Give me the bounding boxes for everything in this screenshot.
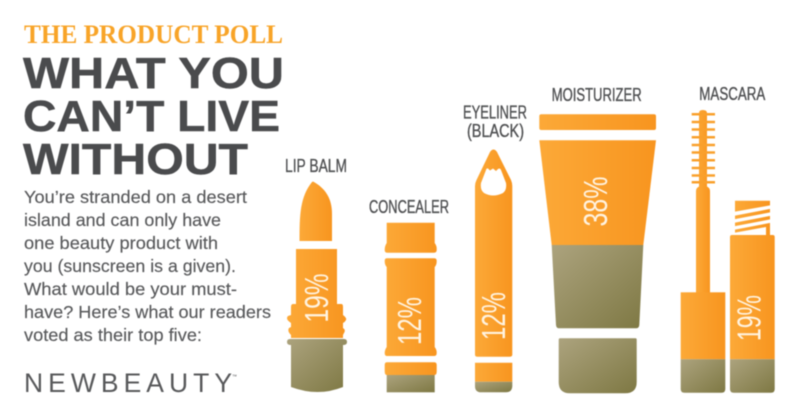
pencil tip base (475, 382, 512, 392)
concealer body (385, 258, 437, 356)
lipstick bullet (300, 182, 332, 241)
mascara tube body (730, 235, 775, 359)
kicker: the product poll: THE PRODUCT POLL (24, 20, 283, 49)
title (23, 49, 284, 184)
product: concealer (369, 197, 449, 392)
intro text block: one beauty product with (24, 233, 218, 253)
logo: NewBeauty: NEWBEAUTY (24, 368, 232, 398)
title: CAN’T LIVE (23, 92, 280, 141)
intro text block: have? Here’s what our readers (24, 302, 271, 322)
mascara tube neck (735, 201, 770, 236)
label: eyeliner (black) (463, 102, 527, 141)
value 12%: 12% (475, 292, 512, 340)
mascara wand (692, 110, 715, 292)
mascara handle (681, 292, 725, 359)
mascara thread stripes (733, 205, 772, 235)
concealer cap (385, 223, 437, 253)
label: moisturizer: MOISTURIZER (552, 85, 642, 105)
label: eyeliner (black): EYELINER (463, 102, 527, 122)
label: lip balm: LIP BALM (285, 156, 347, 176)
concealer base (387, 375, 435, 392)
mascara tube base (730, 359, 775, 393)
intro text block (24, 187, 271, 345)
label: eyeliner (black): (BLACK) (467, 121, 524, 141)
lipstick base (287, 339, 347, 392)
tube upper (539, 140, 656, 245)
tube crimp (539, 114, 656, 130)
title: WITHOUT (23, 135, 248, 184)
lipstick body (287, 249, 346, 338)
pencil body (475, 150, 512, 357)
value 12%: 12% (391, 297, 428, 345)
title: WHAT YOU (23, 49, 284, 98)
intro text block: you (sunscreen is a given). (24, 256, 236, 276)
concealer collar (385, 362, 437, 375)
product: lip balm (285, 156, 347, 392)
intro text block: voted as their top five: (24, 325, 202, 345)
tube cap (559, 338, 637, 393)
pencil end (475, 363, 512, 382)
product: mascara (681, 84, 775, 393)
intro text block: You’re stranded on a desert (24, 187, 247, 207)
value 19%: 19% (298, 274, 335, 322)
logo: NewBeauty: ™ (232, 374, 237, 380)
product: moisturizer (539, 85, 656, 393)
value 19%: 19% (730, 295, 768, 341)
label: mascara: MASCARA (699, 84, 765, 104)
intro text block: island and can only have (24, 210, 221, 230)
intro text block: What would be your must- (24, 279, 237, 299)
mascara handle base (681, 359, 725, 393)
product: eyeliner (463, 102, 527, 392)
value 38%: 38% (577, 176, 614, 226)
label: concealer: CONCEALER (369, 197, 449, 217)
tube lower (552, 245, 643, 328)
